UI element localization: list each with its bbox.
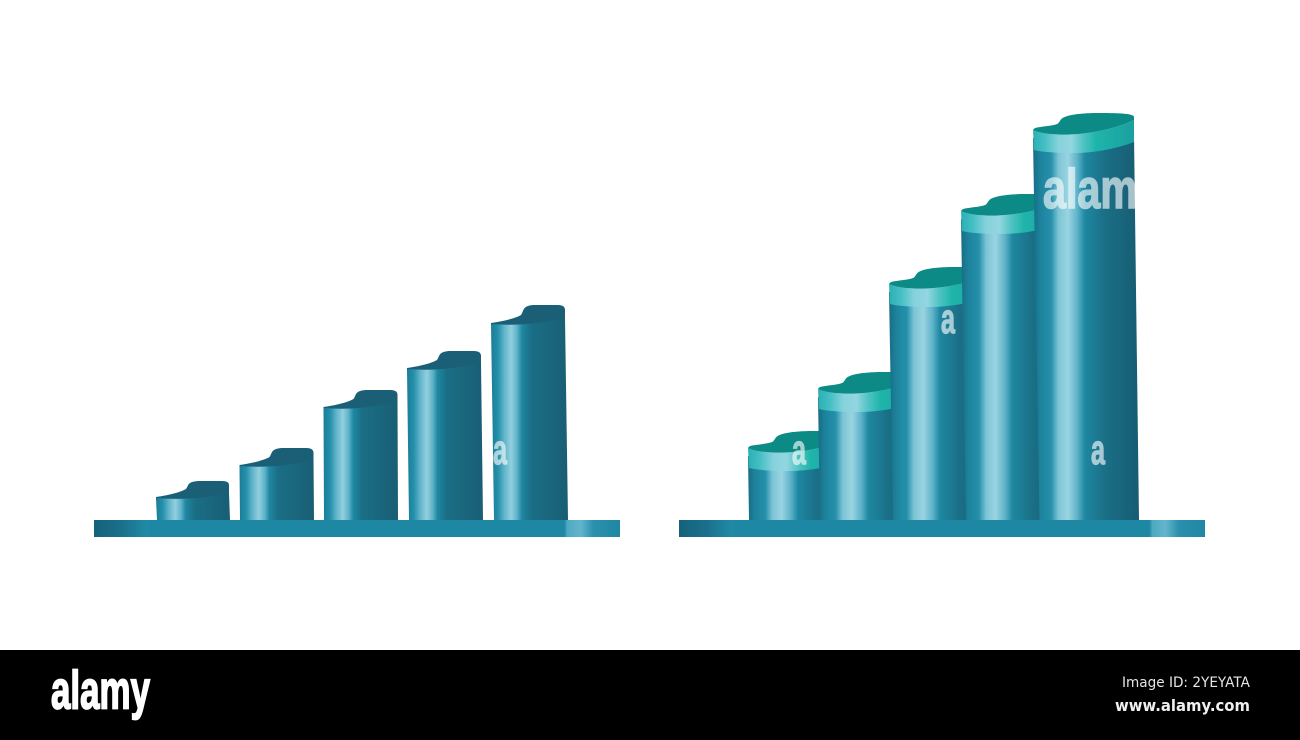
left bar 5	[491, 305, 568, 520]
right bar 1	[748, 431, 850, 520]
left bar 1	[156, 481, 230, 520]
watermark: alamy: a	[1091, 426, 1105, 473]
footer bar	[0, 650, 1300, 740]
right chart base	[679, 520, 1205, 537]
right bar 4	[961, 194, 1066, 520]
left chart: small rising cylinders	[94, 305, 620, 537]
watermark: alamy: alamy	[1043, 157, 1160, 220]
left bar 2	[240, 448, 314, 520]
left bar 4	[407, 351, 483, 520]
website: www.alamy.com	[1115, 696, 1250, 715]
right bar 2	[818, 372, 921, 520]
left chart base	[94, 520, 620, 537]
right bar 3	[889, 267, 993, 520]
right chart: tall overlapping cylinders with teal caps	[679, 113, 1205, 537]
footer logo: alamy	[51, 660, 150, 720]
watermark: alamy: a	[792, 426, 806, 473]
watermark: alamy	[493, 157, 1160, 473]
image id: Image ID: 2YEYATA	[1122, 675, 1250, 691]
left bar 3	[324, 390, 398, 520]
watermark: alamy: a	[941, 295, 955, 342]
right bar 5	[1033, 113, 1139, 520]
watermark: alamy: a	[493, 426, 507, 473]
